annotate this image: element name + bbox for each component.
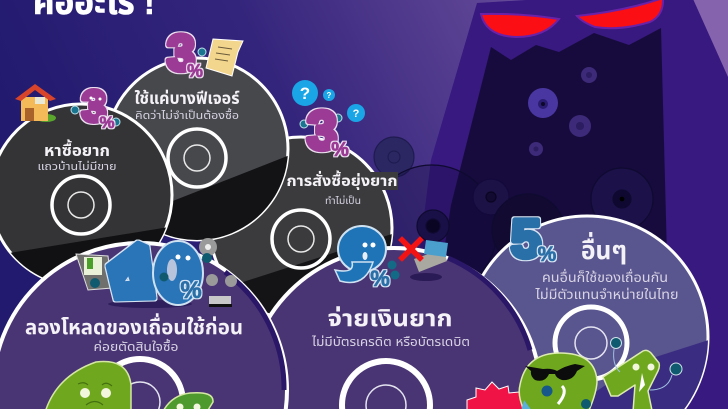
badge: 3% question marks: 3 xyxy=(307,101,337,161)
disc: หาซื้อยาก xyxy=(0,104,175,290)
shadow discs xyxy=(367,137,653,295)
badge: 5% xyxy=(511,209,557,269)
icon: credit card crossed xyxy=(402,240,448,281)
disc: จ่ายเงินยาก xyxy=(247,248,541,409)
numeral zero xyxy=(153,241,203,305)
disc: อื่นๆ: ไม่มีตัวแทนจำหน่ายในไทย xyxy=(534,287,678,302)
badge: 3% house xyxy=(71,82,120,132)
icon: download screen xyxy=(76,254,112,290)
subheading: คิดว่าไม่จำเป็นต้องซื้อ xyxy=(135,107,239,122)
disc: ลองโหลดของเถื่อนใช้ก่อน xyxy=(0,243,287,409)
badge: 3% house: % xyxy=(99,113,115,132)
character: green number with sunglasses xyxy=(519,353,597,409)
badge: 3% scroll xyxy=(167,25,243,81)
subheading: ทำไม่เป็น xyxy=(325,194,361,207)
numeral one xyxy=(108,243,154,299)
disc: อื่นๆ xyxy=(466,216,720,409)
heading: หาซื้อยาก xyxy=(44,139,110,160)
subheading: ค่อยตัดสินใจซื้อ xyxy=(94,338,179,354)
disc: ใช้แค่บางฟีเจอร์ xyxy=(106,58,290,245)
monster eyes xyxy=(481,0,663,37)
badge: 9%: % xyxy=(370,266,390,291)
character: worried green blob xyxy=(42,361,131,409)
subheading: คนอื่นก็ใช้ของเถื่อนกัน xyxy=(542,268,668,285)
subheading: แถวบ้านไม่มีขาย xyxy=(38,160,116,173)
monster cloak xyxy=(400,0,728,409)
heading backing xyxy=(286,172,398,190)
badge: 3% scroll: 3 xyxy=(167,25,195,81)
heading: ใช้แค่บางฟีเจอร์ xyxy=(134,88,240,108)
badge: 3% question marks: % xyxy=(331,139,349,161)
starburst badge xyxy=(467,382,524,409)
badge: 3% question marks: ? xyxy=(300,84,310,103)
disc: การสั่งซื้อยุ่งยาก xyxy=(210,137,398,330)
heading: อื่นๆ xyxy=(581,232,627,265)
monster xyxy=(367,0,728,409)
character: green number one xyxy=(603,338,682,409)
subheading: ไม่มีบัตรเครดิต หรือบัตรเดบิต xyxy=(311,335,470,349)
badge: 3% scroll: % xyxy=(187,61,203,81)
character: small green blob xyxy=(158,393,213,409)
heading: การสั่งซื้อยุ่งยาก xyxy=(286,170,398,190)
monster body spots xyxy=(528,67,597,156)
icon: house xyxy=(15,84,56,122)
badge: 3% house: 3 xyxy=(82,82,106,131)
badge: 3% question marks xyxy=(292,80,365,161)
badge: 5%: % xyxy=(538,243,557,266)
badge: 10% xyxy=(76,238,237,308)
badge: 10%: % xyxy=(180,277,202,304)
badge: 3% question marks: ? xyxy=(327,91,332,100)
badge: 5%: 5 xyxy=(511,209,541,269)
badge: 9% xyxy=(335,226,400,291)
heading: ลองโหลดของเถื่อนใช้ก่อน xyxy=(25,313,243,339)
heading: จ่ายเงินยาก xyxy=(328,305,452,331)
icon: small discs xyxy=(199,238,217,256)
icon: sunglasses xyxy=(525,364,585,381)
monster dark body xyxy=(420,28,671,409)
badge: 3% question marks: ? xyxy=(353,108,360,120)
